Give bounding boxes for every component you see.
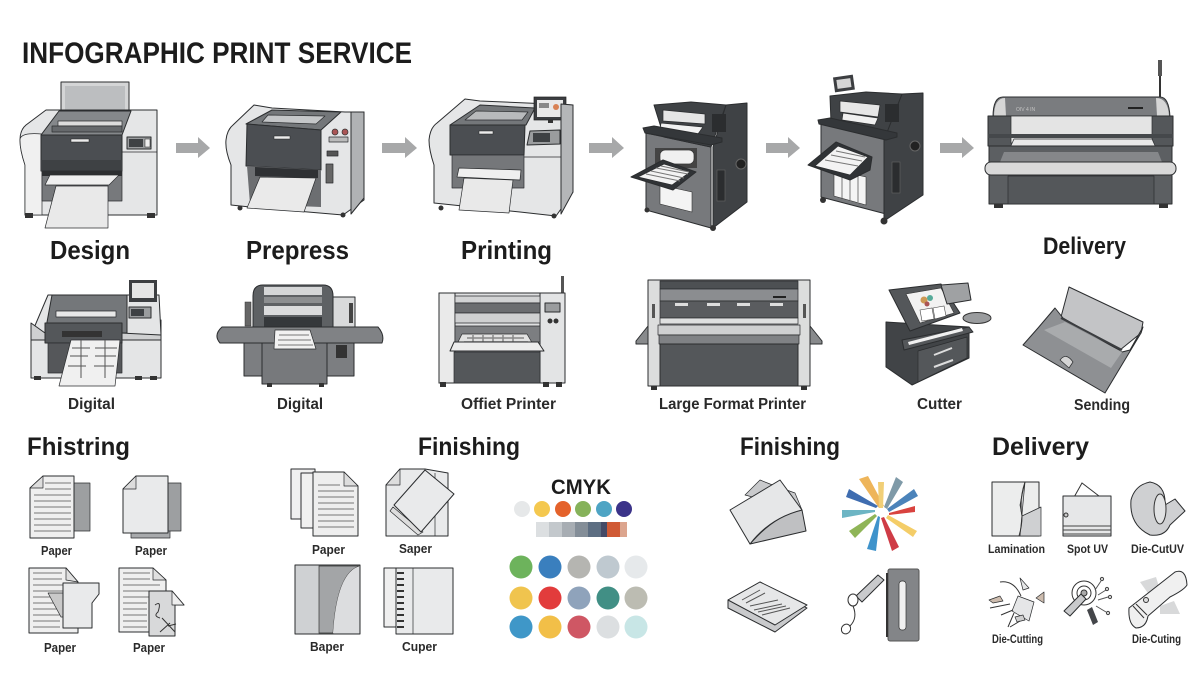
label: Baper: Baper xyxy=(310,639,344,654)
panel: Finishing documents xyxy=(291,433,520,654)
heading: Finishing: Finishing xyxy=(418,433,520,461)
icon: curved panel xyxy=(295,565,360,634)
arrow xyxy=(589,137,624,158)
label: Paper: Paper xyxy=(135,543,167,558)
label: Cuper: Cuper xyxy=(402,639,437,654)
process colour dots xyxy=(514,501,632,517)
icon: rotated sheet on paper xyxy=(386,469,454,536)
icon: stacked paper xyxy=(291,469,358,536)
label: Large Format Printer: Large Format Printer xyxy=(659,396,806,413)
label: Paper: Paper xyxy=(44,640,76,655)
machine: offset printer xyxy=(439,276,565,387)
label: Saper: Saper xyxy=(399,541,432,556)
label: Die-Cuting: Die-Cuting xyxy=(1132,632,1181,646)
label: Digital: Digital xyxy=(277,396,323,413)
heading: Fhistring: Fhistring xyxy=(27,433,130,461)
panel: Finishing objects xyxy=(728,433,919,641)
machine: printing press with monitor xyxy=(429,97,573,218)
machine: wide format delivery unit: OIV 4 IN xyxy=(1016,107,1036,113)
arrow xyxy=(940,137,974,158)
icon: colour burst xyxy=(842,476,918,551)
machine: roller press xyxy=(631,102,747,231)
machine: digital label printer xyxy=(31,280,161,386)
arrow xyxy=(382,137,417,158)
label: Die-Cutting: Die-Cutting xyxy=(992,632,1043,646)
label: Spot UV: Spot UV xyxy=(1067,542,1108,556)
label: Printing: Printing xyxy=(461,235,552,265)
panel: Delivery finishes xyxy=(988,433,1187,646)
machine: press with monitor xyxy=(808,75,923,224)
machine: design printer xyxy=(20,82,157,228)
title: INFOGRAPHIC PRINT SERVICE xyxy=(22,37,412,70)
panel: equipment row xyxy=(31,276,1143,414)
label: Sending: Sending xyxy=(1074,397,1130,414)
label: Design: Design xyxy=(50,235,130,265)
machine: large format printer xyxy=(636,280,822,390)
icon: lined paper with backing xyxy=(30,476,90,538)
icon: spiral bound sheet xyxy=(384,568,453,634)
icon: lined paper with drawing xyxy=(119,568,184,636)
label: Delivery: Delivery xyxy=(1043,233,1127,260)
panel: process flow row xyxy=(20,60,1176,265)
machine: prepress printer xyxy=(226,105,364,218)
icon: blank paper with backing xyxy=(123,476,181,538)
label: Paper: Paper xyxy=(133,640,165,655)
icon: folded sheets xyxy=(730,480,806,544)
label: Die-CutUV: Die-CutUV xyxy=(1131,542,1184,556)
label: Paper: Paper xyxy=(41,543,72,558)
heading: Finishing: Finishing xyxy=(740,433,840,461)
panel: Fhistring xyxy=(27,433,184,655)
machine: wide format delivery unit xyxy=(985,60,1176,208)
icon: spot UV xyxy=(1063,483,1111,536)
heading: Delivery: Delivery xyxy=(992,433,1089,461)
icon: lamination xyxy=(992,482,1041,536)
icon: sending folder xyxy=(1023,287,1143,393)
icon: ruler and tool xyxy=(840,569,919,641)
machine: cutter kiosk xyxy=(886,283,991,385)
arrow xyxy=(176,137,210,158)
machine: digital conveyor printer xyxy=(217,285,383,387)
icon: booklet xyxy=(728,582,807,632)
icon: die-cutting shapes xyxy=(989,578,1044,627)
icon: lined paper with cutout xyxy=(29,568,99,633)
heading: CMYK: CMYK xyxy=(551,476,611,499)
panel: CMYK swatches xyxy=(510,476,648,638)
label: Prepress: Prepress xyxy=(246,235,349,265)
label: Lamination: Lamination xyxy=(988,542,1045,556)
colour swatch grid xyxy=(510,556,648,638)
label: Paper: Paper xyxy=(312,542,345,557)
label: Digital: Digital xyxy=(68,396,115,413)
arrow xyxy=(766,137,800,158)
icon: die-cut UV roll xyxy=(1131,482,1185,535)
label: Offiet Printer: Offiet Printer xyxy=(461,396,556,413)
label: Cutter: Cutter xyxy=(917,396,962,413)
icon: dial tool xyxy=(1064,577,1112,625)
icon: die-cutting glove shape xyxy=(1129,571,1187,628)
tone strip xyxy=(536,522,627,537)
